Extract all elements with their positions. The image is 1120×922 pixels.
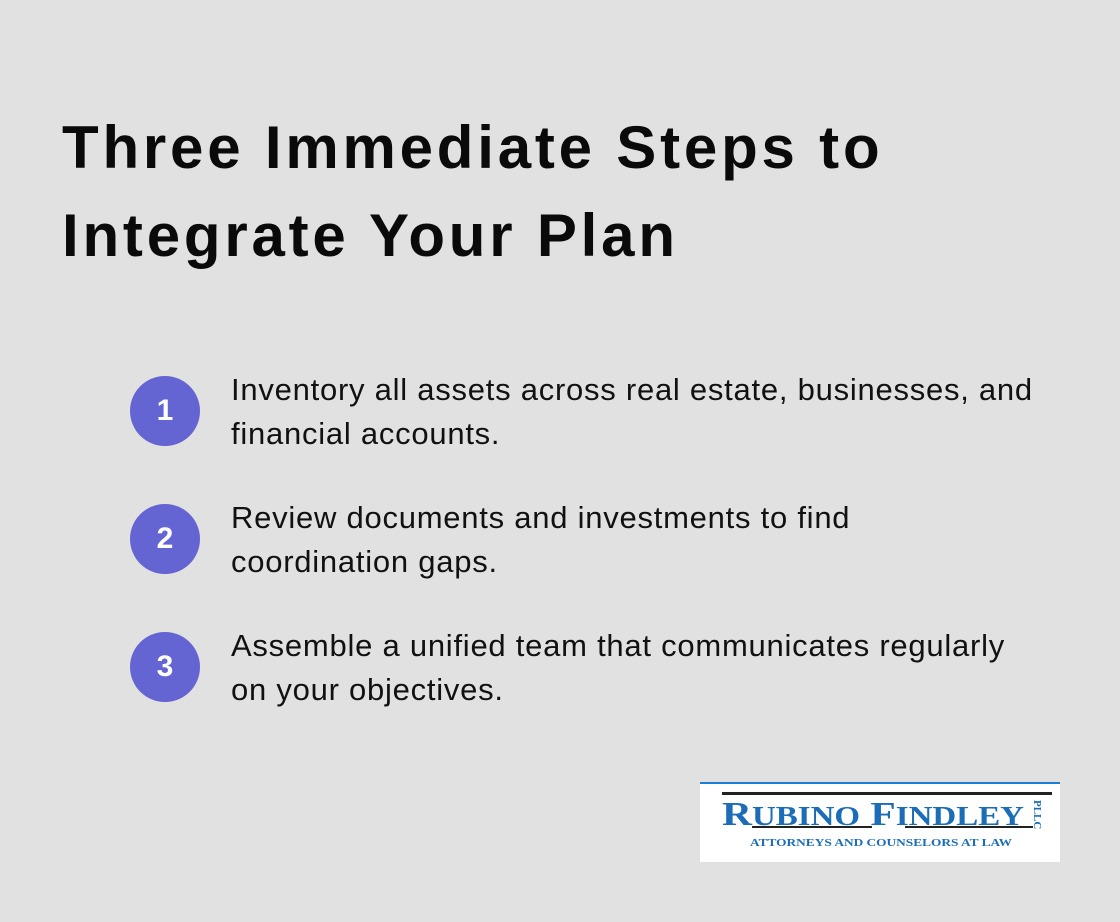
- icon: number 2: 2: [157, 522, 173, 555]
- text: step 2: [231, 500, 850, 579]
- logo: PLLC: [1031, 800, 1043, 829]
- text: step 3: on your objectives.: [231, 672, 504, 707]
- icon: number 3: [130, 632, 200, 702]
- text: step 3: Assemble a unified team that communicates regularly: [231, 628, 1005, 663]
- icon: number 3: 3: [157, 650, 173, 683]
- step 1: [130, 372, 1033, 451]
- step 2: [130, 500, 850, 579]
- text: step 1: [231, 372, 1033, 451]
- text: step 3: [231, 628, 1005, 707]
- title: [62, 114, 883, 269]
- text: step 2: Review documents and investments to find: [231, 500, 850, 535]
- icon: number 1: 1: [157, 394, 173, 427]
- step 3: [130, 628, 1005, 707]
- text: step 1: financial accounts.: [231, 416, 500, 451]
- text: step 2: coordination gaps.: [231, 544, 498, 579]
- icon: number 2: [130, 504, 200, 574]
- logo: [700, 782, 1060, 862]
- logo: ATTORNEYS AND COUNSELORS AT LAW: [750, 837, 1012, 849]
- text: step 1: Inventory all assets across real estate, businesses, and: [231, 372, 1033, 407]
- icon: number 1: [130, 376, 200, 446]
- logo: RUBINO FINDLEY: [722, 796, 1024, 833]
- title: Integrate Your Plan: [62, 202, 679, 269]
- title: Three Immediate Steps to: [62, 114, 883, 181]
